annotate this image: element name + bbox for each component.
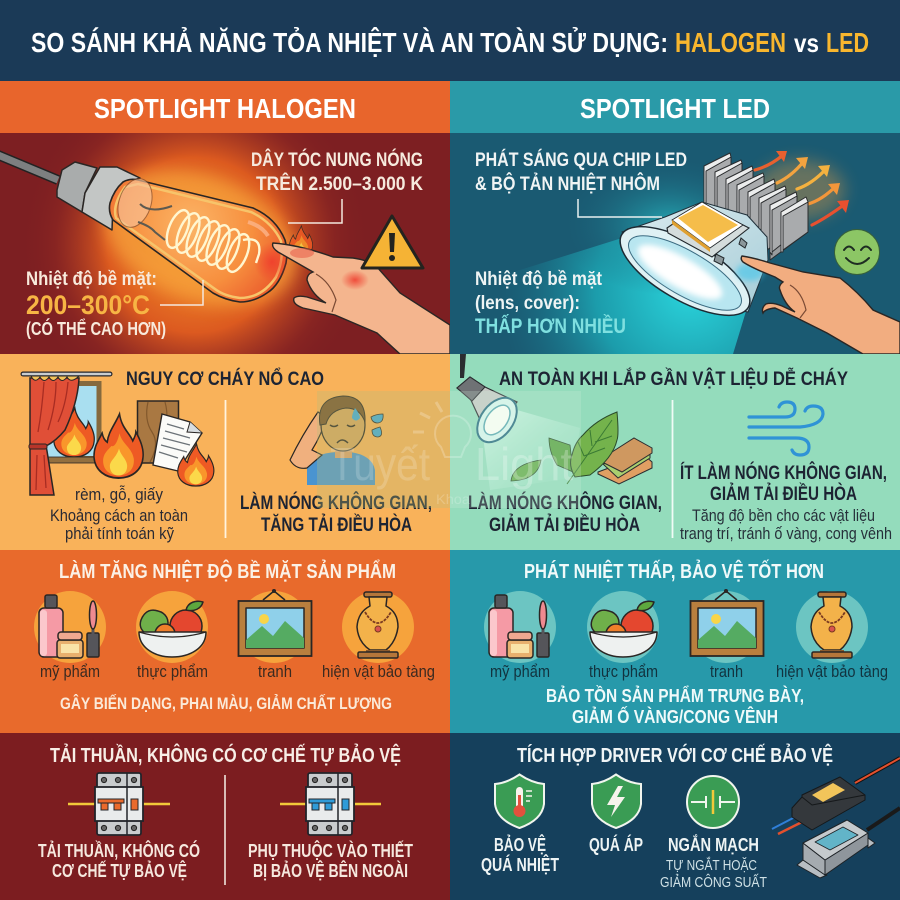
icon: paper sheet bbox=[153, 414, 202, 471]
icon: ceiling spotlight bbox=[457, 354, 580, 490]
caption: materials bbox=[50, 485, 188, 543]
caption: external protection: PHỤ THUỘC VÀO THIẾT bbox=[248, 840, 413, 861]
heading: safe near flammables: AN TOÀN KHI LẮP GẦN VẬT LIỆU DỄ CHÁY bbox=[499, 368, 848, 390]
light beam bbox=[450, 238, 747, 354]
item: museum artifact: hiện vật bảo tàng bbox=[322, 662, 435, 681]
callout: led surface temperature: Nhiệt độ bề mặt bbox=[475, 269, 603, 290]
filament coil bbox=[162, 207, 259, 275]
panel: fire risk bbox=[0, 354, 450, 550]
caption: materials: rèm, gỗ, giấy bbox=[75, 485, 163, 504]
icon: flames at fingertip bbox=[289, 226, 313, 256]
icon: burnt hand bbox=[273, 243, 450, 354]
icon: blue breaker bbox=[280, 773, 381, 835]
icon: led drivers bbox=[772, 758, 900, 878]
caption: pure load: TẢI THUẦN, KHÔNG CÓ bbox=[38, 840, 200, 861]
icon: window with curtain on fire bbox=[23, 374, 110, 495]
callout: surface temperature: (CÓ THỂ CAO HƠN) bbox=[26, 318, 166, 339]
icon: overvoltage shield bbox=[592, 774, 641, 828]
icon: hand touching led bbox=[741, 256, 900, 354]
caption: pure load bbox=[38, 840, 200, 881]
icon: small flame bbox=[178, 444, 214, 486]
caption: external protection: BỊ BẢO VỆ BÊN NGOÀI bbox=[253, 860, 408, 881]
caption: external protection bbox=[248, 840, 413, 881]
callout: filament temperature bbox=[251, 149, 423, 223]
heading: spotlight led bbox=[450, 81, 900, 133]
callout: led chip bbox=[475, 149, 687, 217]
caption: overheat: BẢO VỆ bbox=[494, 834, 546, 855]
caption: short circuit bbox=[660, 834, 767, 891]
caption: led room heat bbox=[468, 492, 662, 536]
caption: preservation: GIẢM Ố VÀNG/CONG VÊNH bbox=[572, 706, 778, 727]
heading: low heat protection: PHÁT NHIỆT THẤP, BẢO VỆ TỐT HƠN bbox=[524, 559, 824, 583]
item: food bbox=[136, 591, 208, 681]
caption: overheat bbox=[481, 834, 559, 875]
item: cosmetics: mỹ phẩm bbox=[490, 662, 550, 681]
chip bbox=[667, 204, 749, 257]
icon: sweating person bbox=[290, 396, 383, 485]
callout: surface temperature bbox=[26, 269, 203, 339]
title: vs bbox=[794, 28, 819, 58]
icon: short circuit bbox=[687, 776, 739, 828]
callout: led surface temperature: THẤP HƠN NHIỀU bbox=[475, 315, 626, 338]
panel: integrated driver bbox=[450, 733, 900, 900]
icon: large flame bbox=[94, 414, 143, 478]
item: cosmetics bbox=[34, 591, 106, 681]
item: painting: tranh bbox=[258, 662, 292, 681]
callout: surface temperature: 200–300°C bbox=[26, 290, 150, 320]
callout: surface temperature: Nhiệt độ bề mặt: bbox=[26, 269, 157, 290]
heading: pure load: TẢI THUẦN, KHÔNG CÓ CƠ CHẾ TỰ BẢO VỆ bbox=[50, 743, 401, 767]
icon: orange breaker bbox=[68, 773, 170, 835]
title: SO SÁNH KHẢ NĂNG TỎA NHIỆT VÀ AN TOÀN SỬ DỤNG: bbox=[31, 26, 668, 58]
item: food: thực phẩm bbox=[589, 662, 658, 681]
caption: product damage: GÂY BIẾN DẠNG, PHAI MÀU, GIẢM CHẤT LƯỢNG bbox=[60, 694, 392, 713]
icon: smiley bbox=[834, 230, 880, 274]
caption: short circuit: NGẮN MẠCH bbox=[668, 834, 759, 855]
heading: raises product temperature: LÀM TĂNG NHIỆT ĐỘ BỀ MẶT SẢN PHẨM bbox=[59, 559, 396, 583]
callout: filament temperature: TRÊN 2.500–3.000 K bbox=[256, 173, 423, 195]
caption: materials: phải tính toán kỹ bbox=[65, 524, 174, 543]
watermark: Khoa bbox=[436, 491, 470, 507]
icon: wind bbox=[749, 402, 823, 455]
header band bbox=[0, 0, 900, 81]
caption: led room heat: GIẢM TẢI ĐIỀU HÒA bbox=[489, 514, 640, 536]
watermark bbox=[317, 391, 581, 508]
item: museum artifact bbox=[776, 591, 888, 681]
panel: halogen hero bbox=[0, 133, 450, 354]
heading: spotlight halogen bbox=[0, 81, 450, 133]
icon: warning triangle bbox=[362, 216, 423, 268]
panel: safe near flammables bbox=[450, 354, 900, 550]
icon: thermometer shield bbox=[495, 774, 544, 828]
heading: fire risk: NGUY CƠ CHÁY NỔ CAO bbox=[126, 368, 324, 390]
icon: led lamp body bbox=[607, 202, 768, 333]
callout: led chip: PHÁT SÁNG QUA CHIP LED bbox=[475, 149, 687, 171]
callout: led chip: & BỘ TẢN NHIỆT NHÔM bbox=[475, 173, 660, 195]
caption: short circuit: GIẢM CÔNG SUẤT bbox=[660, 874, 767, 891]
caption: preservation: BẢO TỒN SẢN PHẨM TRƯNG BÀY, bbox=[546, 685, 804, 706]
icon: heat arrows bbox=[755, 151, 849, 225]
caption: pure load: CƠ CHẾ TỰ BẢO VỆ bbox=[52, 860, 187, 881]
icon: halogen bulb bbox=[0, 146, 315, 330]
panel: low heat protection bbox=[450, 550, 900, 733]
item: food bbox=[587, 591, 659, 681]
watermark: Tuyết bbox=[330, 438, 430, 490]
title: LED bbox=[826, 27, 869, 58]
item: food: thực phẩm bbox=[137, 662, 208, 681]
caption: preservation bbox=[546, 685, 804, 727]
caption: overvoltage: QUÁ ÁP bbox=[589, 834, 643, 855]
heading: integrated driver: TÍCH HỢP DRIVER VỚI CƠ CHẾ BẢO VỆ bbox=[517, 743, 833, 767]
icon: leaves bbox=[511, 412, 618, 484]
caption: less room heat bbox=[680, 462, 892, 543]
panel: led hero bbox=[450, 133, 900, 354]
item: cosmetics: mỹ phẩm bbox=[40, 662, 100, 681]
caption: led room heat: LÀM NÓNG KHÔNG GIAN, bbox=[468, 492, 662, 514]
item: painting bbox=[690, 589, 764, 681]
caption: short circuit: TỰ NGẮT HOẶC bbox=[666, 856, 757, 874]
heading: spotlight led: SPOTLIGHT LED bbox=[580, 93, 770, 124]
icon: wooden board bbox=[138, 401, 178, 463]
caption: heats the room bbox=[240, 492, 432, 536]
icon: aluminium heat sink bbox=[704, 153, 808, 260]
item: cosmetics bbox=[484, 591, 556, 681]
callout: led surface temperature: (lens, cover): bbox=[475, 293, 580, 314]
caption: heats the room: LÀM NÓNG KHÔNG GIAN, bbox=[240, 492, 432, 514]
panel: pure load no protection bbox=[0, 733, 450, 900]
panel: raises product temperature bbox=[0, 550, 450, 733]
caption: materials: Khoảng cách an toàn bbox=[50, 506, 188, 525]
caption: less room heat: Tăng độ bền cho các vật liệu bbox=[692, 507, 875, 525]
item: museum artifact bbox=[322, 591, 435, 681]
caption: heats the room: TĂNG TẢI ĐIỀU HÒA bbox=[261, 514, 412, 536]
callout: filament temperature: DÂY TÓC NUNG NÓNG bbox=[251, 149, 423, 171]
callout: led surface temperature bbox=[475, 269, 626, 338]
item: painting bbox=[238, 589, 312, 681]
item: painting: tranh bbox=[710, 662, 743, 681]
title: HALOGEN bbox=[675, 27, 786, 58]
watermark: Light bbox=[475, 438, 573, 490]
caption: less room heat: GIẢM TẢI ĐIỀU HÒA bbox=[710, 483, 857, 505]
caption: overheat: QUÁ NHIỆT bbox=[481, 854, 559, 875]
icon: books bbox=[598, 438, 652, 484]
heading: spotlight halogen: SPOTLIGHT HALOGEN bbox=[94, 93, 356, 124]
